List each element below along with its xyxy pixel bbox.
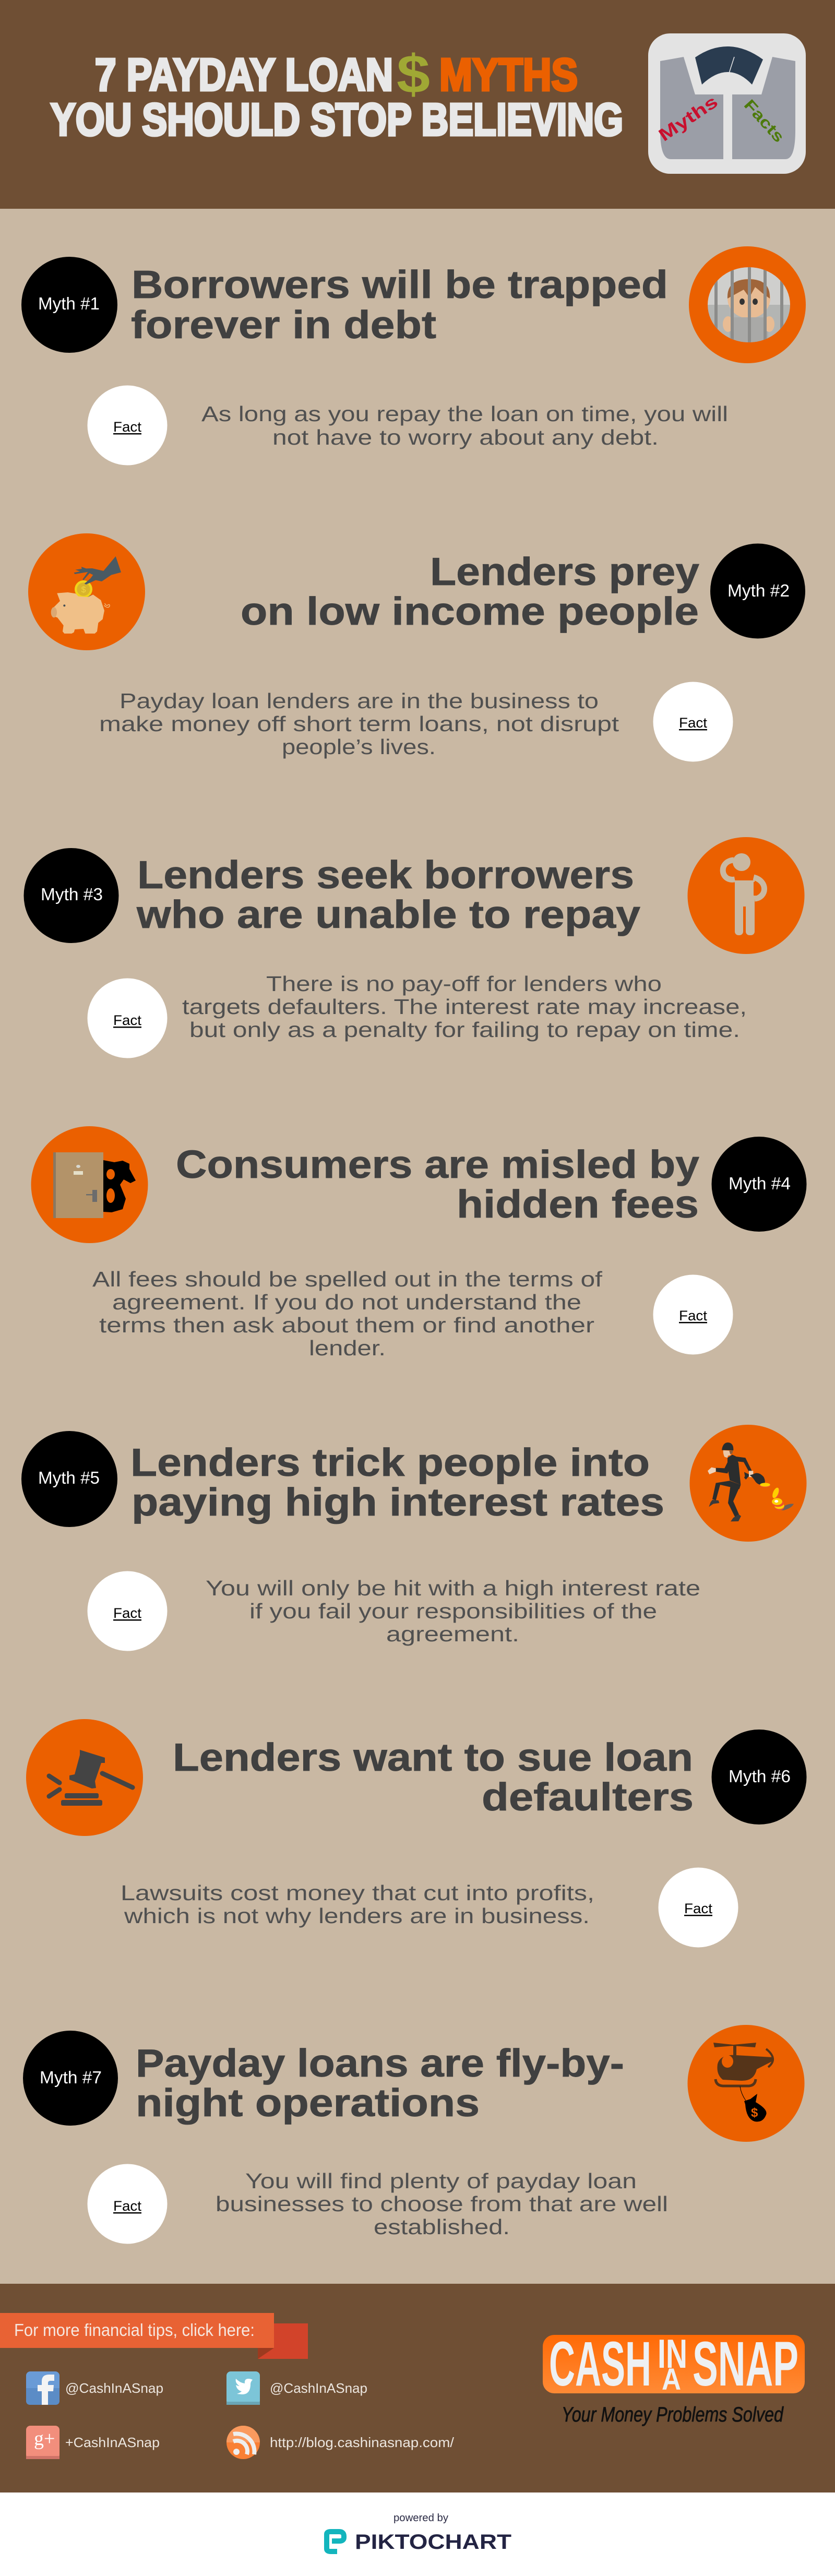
fact 5 text: You will only be hit with a high interest rate	[206, 1576, 700, 1600]
fact 4 text: All fees should be spelled out in the terms of	[92, 1267, 603, 1291]
myth 4 heading	[176, 1142, 699, 1226]
fact badge 5: Fact	[113, 1605, 142, 1621]
logo: cash in a snap: CASH	[549, 2328, 651, 2399]
myth 7 heading: Payday loans are fly-by-	[136, 2041, 624, 2085]
panel: piktochart credit	[0, 2492, 835, 2576]
myth 1 heading: forever in debt	[131, 303, 436, 347]
icon: helicopter carrying a money bag: $	[751, 2106, 758, 2120]
fact badge 2	[653, 682, 733, 762]
logo: cash in a snap	[543, 2328, 805, 2426]
panel: myth 4	[31, 1126, 807, 1360]
fact 3 text	[182, 972, 747, 1042]
fact 2 text: Payday loan lenders are in the business to	[120, 689, 599, 713]
panel: myth 1	[21, 246, 806, 466]
myth badge 3	[24, 848, 119, 943]
powered by text: powered by	[393, 2512, 448, 2524]
myth badge 7	[23, 2031, 118, 2126]
icon: piggy bank with coin: $	[81, 586, 86, 594]
panel: myth 2	[28, 533, 805, 762]
fact badge 5	[88, 1571, 167, 1651]
icon: weighing scale with myths and facts: Facts	[741, 97, 788, 146]
myth 5 heading: paying high interest rates	[132, 1480, 664, 1524]
fact 1 text: not have to worry about any debt.	[272, 425, 659, 449]
myth badge 2	[710, 544, 805, 639]
title: 7 PAYDAY LOAN	[95, 50, 393, 100]
title: YOU SHOULD STOP BELIEVING	[51, 94, 623, 145]
logo: cash in a snap: A	[662, 2363, 681, 2396]
social: google plus: g+	[34, 2428, 55, 2450]
myth 2 heading: on low income people	[241, 589, 699, 633]
panel: header	[0, 0, 835, 209]
myth badge 2: Myth #2	[727, 581, 790, 600]
panel: myth 6	[26, 1719, 807, 1948]
icon: prisoner behind bars	[689, 246, 806, 363]
icon: robber running with coin bag	[690, 1425, 807, 1542]
fact 5 text: if you fail your responsibilities of the	[249, 1599, 657, 1623]
myth badge 6: Myth #6	[729, 1767, 791, 1786]
fact badge 3	[88, 978, 167, 1058]
myth 7 heading	[136, 2041, 624, 2125]
myth 6 heading: defaulters	[482, 1775, 694, 1819]
myth 7 heading: night operations	[136, 2081, 480, 2125]
social: facebook	[26, 2371, 163, 2405]
icon: thinking figure	[688, 837, 805, 954]
piktochart wordmark: PIKTOCHART	[355, 2531, 511, 2554]
fact 3 text: There is no pay-off for lenders who	[266, 972, 662, 996]
fact badge 3: Fact	[113, 1012, 142, 1028]
icon: weighing scale with myths and facts: Myths	[655, 92, 722, 146]
fact 7 text: businesses to choose from that are well	[216, 2192, 668, 2216]
social: twitter: @CashInASnap	[270, 2380, 367, 2396]
fact 1 text	[201, 402, 728, 449]
fact 7 text	[216, 2169, 668, 2239]
fact 1 text: As long as you repay the loan on time, you will	[201, 402, 728, 426]
fact 7 text: You will find plenty of payday loan	[245, 2169, 637, 2193]
myth 3 heading: Lenders seek borrowers	[137, 853, 634, 897]
social: blog rss: http://blog.cashinasnap.com/	[270, 2435, 455, 2450]
fact badge 7	[88, 2164, 167, 2244]
social: facebook: @CashInASnap	[65, 2380, 163, 2396]
fact badge 4	[653, 1274, 733, 1355]
icon: helicopter carrying a money bag	[688, 2025, 805, 2142]
fact badge 1: Fact	[113, 419, 142, 435]
myth 5 heading	[130, 1440, 664, 1524]
fact 4 text	[92, 1267, 603, 1360]
ribbon: financial tips: For more financial tips, click here:	[14, 2320, 255, 2340]
title: MYTHS	[439, 50, 578, 100]
fact 4 text: lender.	[309, 1336, 386, 1360]
social: blog rss	[226, 2426, 455, 2459]
icon: piktochart logo	[327, 2532, 344, 2551]
myth 4 heading: Consumers are misled by	[176, 1142, 699, 1186]
title	[51, 44, 623, 145]
myth 3 heading	[136, 853, 640, 936]
fact badge 6	[659, 1867, 738, 1948]
fact 3 text: but only as a penalty for failing to repay on time.	[189, 1018, 740, 1042]
panel: myth 3	[24, 837, 805, 1058]
icon: weighing scale with myths and facts	[648, 33, 806, 174]
panel: myth 5	[21, 1425, 807, 1651]
logo: cash in a snap: IN	[658, 2331, 687, 2377]
fact 3 text: targets defaulters. The interest rate may increase,	[182, 995, 747, 1019]
logo: cash in a snap: Your Money Problems Solved	[562, 2403, 784, 2426]
myth badge 1	[21, 257, 117, 353]
social: twitter	[226, 2371, 367, 2405]
fact 6 text: Lawsuits cost money that cut into profits,	[121, 1881, 594, 1905]
fact badge 1	[88, 385, 167, 466]
social: google plus: +CashInASnap	[65, 2435, 160, 2450]
icon: door hiding a dollar sign	[31, 1126, 148, 1243]
fact 4 text: terms then ask about them or find another	[99, 1313, 594, 1337]
panel: footer	[0, 2284, 835, 2492]
fact badge 2: Fact	[679, 715, 708, 731]
myth 1 heading	[131, 263, 668, 347]
myth badge 5: Myth #5	[38, 1468, 100, 1487]
myth 2 heading: Lenders prey	[430, 550, 699, 593]
myth 2 heading	[241, 550, 699, 633]
myth 6 heading: Lenders want to sue loan	[173, 1735, 693, 1779]
fact 2 text: make money off short term loans, not disrupt	[99, 712, 619, 736]
fact badge 4: Fact	[679, 1308, 708, 1323]
fact 2 text: people’s lives.	[282, 735, 436, 759]
myth badge 4	[712, 1137, 807, 1232]
icon: piggy bank with coin	[28, 533, 145, 650]
fact badge 7: Fact	[113, 2198, 142, 2214]
fact 6 text: which is not why lenders are in business.	[124, 1904, 590, 1928]
myth 4 heading: hidden fees	[457, 1182, 699, 1226]
myth badge 4: Myth #4	[729, 1174, 791, 1193]
myth badge 6	[712, 1730, 807, 1824]
myth badge 3: Myth #3	[41, 885, 103, 904]
myth 6 heading	[173, 1735, 694, 1819]
fact 5 text: agreement.	[386, 1622, 519, 1646]
fact badge 6: Fact	[684, 1901, 713, 1916]
myth badge 5	[21, 1431, 117, 1527]
icon: gavel	[26, 1719, 143, 1836]
myth badge 1: Myth #1	[38, 294, 100, 313]
panel: myth 7	[23, 2025, 805, 2244]
fact 5 text	[206, 1576, 700, 1646]
title: $	[397, 44, 430, 105]
social: google plus	[26, 2426, 160, 2459]
myth 5 heading: Lenders trick people into	[130, 1440, 650, 1484]
fact 2 text	[99, 689, 619, 759]
myth 1 heading: Borrowers will be trapped	[132, 263, 668, 306]
myth 3 heading: who are unable to repay	[136, 892, 640, 936]
fact 7 text: established.	[374, 2215, 510, 2239]
ribbon: financial tips	[0, 2313, 308, 2359]
fact 4 text: agreement. If you do not understand the	[112, 1290, 581, 1314]
myth badge 7: Myth #7	[40, 2068, 102, 2087]
fact 6 text	[121, 1881, 594, 1928]
